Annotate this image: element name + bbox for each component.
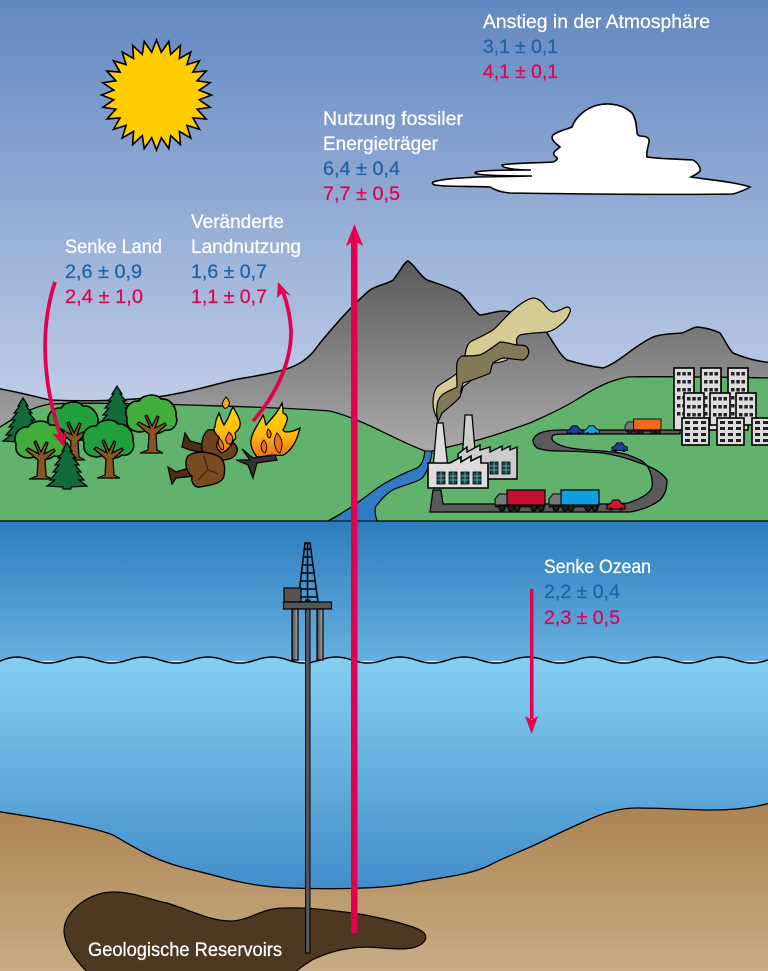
chimney front [433,423,448,468]
text: ocean sink: 2,2 ± 0,4 [544,582,620,603]
arrow: land use change [253,282,291,421]
window 2 [449,472,457,484]
text: land use: 1,1 ± 0,7 [191,287,267,308]
text: fossil fuels [323,109,464,205]
car blue on bend [612,443,627,452]
mountains [0,261,768,480]
car navy [567,426,582,435]
log lower [186,452,225,487]
truck blue [549,490,599,511]
window 3 [461,472,469,484]
truck red [495,490,545,511]
factory [428,415,517,488]
tower 3 [728,368,748,430]
oil rig [284,543,332,953]
text: land use: 1,6 ± 0,7 [191,262,267,283]
platform cabin [284,588,301,602]
log rings [198,456,218,480]
factory front hall [428,456,488,488]
text: atmosphere: 4,1 ± 0,1 [483,62,558,83]
text: land use: Landnutzung [191,237,301,258]
tree: leafy front [83,420,134,478]
sky background [0,0,768,430]
well pipe [306,600,310,953]
block 3 [752,418,768,445]
root lower [168,466,197,484]
window 1 [437,472,445,484]
flames left [214,407,240,453]
block 1 [682,418,709,445]
tree: leafy left [15,421,66,479]
car red [607,500,625,511]
arrow: land sink [45,282,67,447]
root upper [182,433,205,453]
rear window 2 [502,462,510,474]
city [674,368,768,445]
text: land sink [65,237,162,308]
text: atmosphere [483,12,710,83]
leg left [292,609,298,660]
rear window 1 [490,462,498,474]
leg right [317,609,323,660]
flames right [251,403,300,457]
arrow: ocean sink [525,589,538,734]
text: land sink: Senke Land [65,237,162,258]
text: ocean sink [544,557,651,629]
text: ocean sink: 2,3 ± 0,5 [544,608,620,629]
tree: leafy back centre [48,402,99,460]
trees: forest [3,386,177,489]
geological reservoir [64,892,426,971]
text: land sink: 2,4 ± 1,0 [65,287,143,308]
tree: leafy right [126,395,177,453]
platform deck [284,602,332,609]
text: fossil fuels: 7,7 ± 0,5 [323,184,400,205]
text: land sink: 2,6 ± 0,9 [65,262,142,283]
smoke plume [433,298,570,422]
factory rear hall [458,445,517,479]
charred branch [236,449,277,478]
tower 6 [736,393,756,425]
vehicles [495,419,661,511]
right green land [375,377,768,521]
car cyan [584,426,599,435]
ocean upper layer [0,521,768,661]
icon: sun [102,40,212,150]
tree: fir front [47,443,87,489]
tower 1 [674,368,694,430]
text: atmosphere: 3,1 ± 0,1 [483,37,558,58]
tree: background fir left [3,398,43,444]
log upper [202,430,237,460]
tower 2 [701,368,721,430]
truck orange [625,419,661,434]
seabed sediment [0,802,768,971]
block 2 [717,418,744,445]
road [430,430,680,512]
tree: background fir centre [97,386,137,432]
text: geological reservoirs: Geologische Reservoirs [88,940,282,961]
burning logs [168,397,300,487]
smoke light [433,298,570,420]
smoke dark [437,342,529,422]
text: atmosphere: Anstieg in der Atmosphäre [483,12,710,33]
text: land use [191,212,301,308]
chimney rear [462,415,476,462]
flame small [222,397,229,408]
tower 5 [710,393,730,425]
left green land [0,403,425,521]
tower 4 [684,393,704,425]
derrick [298,543,318,602]
flames left inner [218,432,233,450]
text: fossil fuels: Energieträger [323,134,439,155]
river [329,451,432,521]
text: fossil fuels: Nutzung fossiler [323,109,464,130]
icon: cloud [432,104,750,194]
text: fossil fuels: 6,4 ± 0,4 [323,159,400,180]
window 4 [473,472,481,484]
text: ocean sink: Senke Ozean [544,557,651,578]
flames right inner [261,429,282,453]
text: land use: Veränderte [191,212,284,233]
ocean lower layer [0,657,768,900]
arrow: fossil fuels up [346,224,363,933]
